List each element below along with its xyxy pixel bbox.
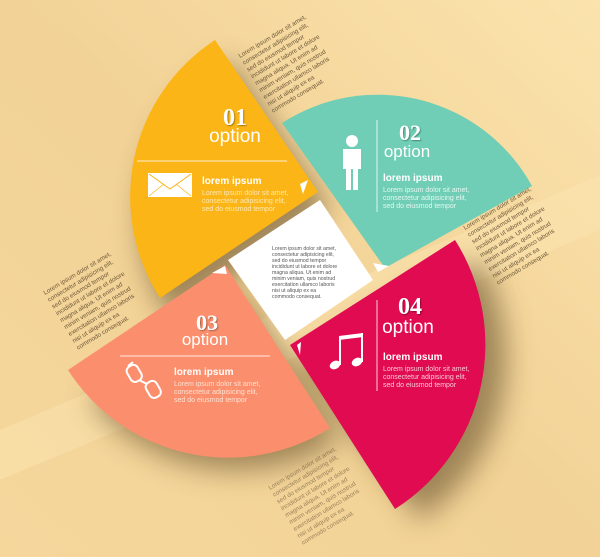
text: left rotated: nisi ut aliquip ex ea	[71, 311, 121, 345]
text: bottom rotated: commodo consequat.	[300, 509, 356, 547]
text: right rotated: exercitation ullamco laboris	[487, 228, 556, 273]
panel: 02 teal: sed do eiusmod tempor	[383, 203, 457, 210]
panel: 01 yellow: Lorem ipsum dolor sit amet,	[202, 190, 288, 197]
center square: consectetur adipisicing elit,	[272, 252, 334, 258]
center square	[228, 200, 373, 340]
text: right rotated	[462, 185, 567, 287]
text: left rotated: exercitation ullamco laboris	[67, 293, 136, 338]
text: left rotated: consectetur adipisicing elit,	[47, 259, 115, 304]
panel: 02 teal: 02	[399, 120, 421, 145]
text: left rotated: minim veniam, quis nostrud	[63, 285, 133, 331]
panel: 01 yellow	[130, 40, 318, 298]
icon: glasses	[125, 362, 163, 400]
panel: 03 orange: Lorem ipsum dolor sit amet,	[174, 381, 260, 388]
shadows	[90, 60, 506, 520]
text: left rotated: magna aliqua. Ut enim ad	[59, 281, 124, 324]
center square: minim veniam, quis nostrud	[272, 276, 335, 282]
panel: 02 teal: lorem ipsum	[383, 173, 443, 184]
text: right rotated: minim veniam, quis nostrud	[483, 220, 553, 266]
panel: 02 teal	[282, 95, 532, 272]
text: right rotated: sed do eiusmod tempor	[471, 206, 531, 245]
icon: person	[343, 135, 361, 190]
center square: nisi ut aliquip ex ea	[272, 288, 316, 294]
text: left rotated: sed do eiusmod tempor	[51, 271, 111, 310]
panel: 04 red	[290, 240, 485, 509]
panel: 01 yellow: option	[209, 126, 261, 147]
text: left rotated: Lorem ipsum dolor sit amet,	[42, 251, 113, 297]
panel: 04 red: Lorem ipsum dolor sit amet,	[383, 366, 469, 373]
text: top rotated	[237, 13, 342, 115]
center square: commodo consequat.	[272, 294, 322, 300]
text: top rotated: exercitation ullamco laboris	[262, 56, 331, 101]
text: left rotated: commodo consequat.	[75, 314, 131, 352]
center square: sed do eiusmod tempor	[272, 258, 326, 264]
text: top rotated: consectetur adipisicing elit,	[242, 22, 310, 67]
panel: 03 orange: 03	[196, 310, 218, 335]
text: top rotated: incididunt ut labore et dolore	[250, 33, 322, 80]
panel: 03 orange: consectetur adipisicing elit,	[174, 389, 258, 396]
text: bottom rotated: exercitation ullamco laboris	[292, 488, 361, 533]
text: right rotated: magna aliqua. Ut enim ad	[479, 216, 544, 259]
text: right rotated: incididunt ut labore et dolore	[475, 205, 547, 252]
text: bottom rotated: consectetur adipisicing elit,	[272, 454, 340, 499]
text: bottom rotated: magna aliqua. Ut enim ad	[284, 476, 349, 519]
panel: 01 yellow: sed do eiusmod tempor	[202, 206, 276, 213]
panel: 01 yellow: consectetur adipisicing elit,	[202, 198, 286, 205]
panel: 03 orange: option	[182, 330, 228, 349]
text: bottom rotated: sed do eiusmod tempor	[276, 466, 336, 505]
panel: 03 orange	[68, 265, 330, 458]
panel: 02 teal: consectetur adipisicing elit,	[383, 195, 467, 202]
text: right rotated: nisi ut aliquip ex ea	[491, 246, 541, 280]
center square: magna aliqua. Ut enim ad	[272, 270, 331, 276]
text: bottom rotated	[267, 445, 372, 547]
panel: 01 yellow: 01	[223, 105, 247, 131]
text: bottom rotated: Lorem ipsum dolor sit amet,	[267, 446, 338, 492]
panel: 01 yellow: lorem ipsum	[202, 176, 262, 187]
panel: 04 red: 04	[398, 294, 422, 320]
panel: 03 orange: sed do eiusmod tempor	[174, 397, 248, 404]
panel: 02 teal: Lorem ipsum dolor sit amet,	[383, 187, 469, 194]
center square: incididunt ut labore et dolore	[272, 264, 337, 270]
center square: Lorem ipsum dolor sit amet,	[272, 246, 336, 252]
text: top rotated: sed do eiusmod tempor	[246, 34, 306, 73]
text: top rotated: minim veniam, quis nostrud	[258, 48, 328, 94]
panel: 04 red: option	[382, 317, 434, 338]
text: bottom rotated: nisi ut aliquip ex ea	[296, 506, 346, 540]
panel: 03 orange: lorem ipsum	[174, 367, 234, 378]
text: top rotated: magna aliqua. Ut enim ad	[254, 44, 319, 87]
text: bottom rotated: minim veniam, quis nostrud	[288, 480, 358, 526]
panel: 02 teal: option	[384, 142, 430, 161]
text: top rotated: Lorem ipsum dolor sit amet,	[237, 14, 308, 60]
text: top rotated: commodo consequat.	[270, 77, 326, 115]
text: right rotated: Lorem ipsum dolor sit amet,	[462, 186, 533, 232]
center square: exercitation ullamco laboris	[272, 282, 335, 288]
text: left rotated: incididunt ut labore et dolore	[55, 270, 127, 317]
panel: 04 red: sed do eiusmod tempor	[383, 382, 457, 389]
text: right rotated: consectetur adipisicing elit,	[467, 194, 535, 239]
text: right rotated: commodo consequat.	[495, 249, 551, 287]
text: top rotated: nisi ut aliquip ex ea	[266, 74, 316, 108]
icon: music note	[328, 333, 364, 371]
text: bottom rotated: incididunt ut labore et dolore	[280, 465, 352, 512]
text: left rotated	[42, 250, 147, 352]
panel: 04 red: lorem ipsum	[383, 352, 443, 363]
panel: 04 red: consectetur adipisicing elit,	[383, 374, 467, 381]
icon: envelope	[148, 173, 192, 197]
